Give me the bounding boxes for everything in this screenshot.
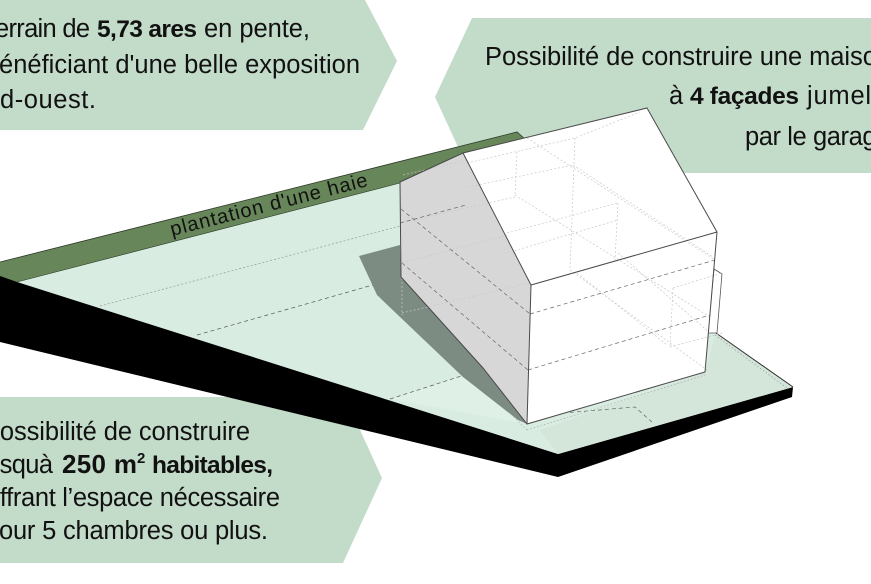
interior structure lines: [400, 112, 722, 370]
storey lines: [400, 205, 715, 370]
house shadow: [359, 245, 527, 424]
gable side face: [400, 153, 531, 424]
house volume: [400, 108, 722, 424]
panel: terrain callout: [0, 0, 397, 130]
panel: house type callout: 4 façades: [690, 83, 799, 110]
panel: living area callout: [0, 397, 382, 563]
panel: house type callout: [435, 18, 871, 173]
house outline: [400, 108, 717, 424]
garage: [708, 269, 722, 333]
panel: terrain callout: 5,73 ares: [97, 16, 197, 43]
terrain plot: [0, 183, 793, 477]
panel: house type callout: à: [669, 82, 684, 110]
hedge label: plantation d'une haie: [168, 169, 370, 241]
front and roof faces: [463, 108, 717, 424]
plot surface: [17, 183, 793, 454]
plot side in black: [0, 275, 793, 477]
panel: terrain callout: en pente,: [204, 15, 310, 43]
panel: living area callout: 250 m: [62, 449, 137, 479]
hedge strip: [0, 132, 525, 282]
plot dashed lines: [100, 226, 787, 430]
panel: living area callout: 2: [137, 450, 145, 467]
panel: living area callout: habitables,: [152, 452, 273, 479]
